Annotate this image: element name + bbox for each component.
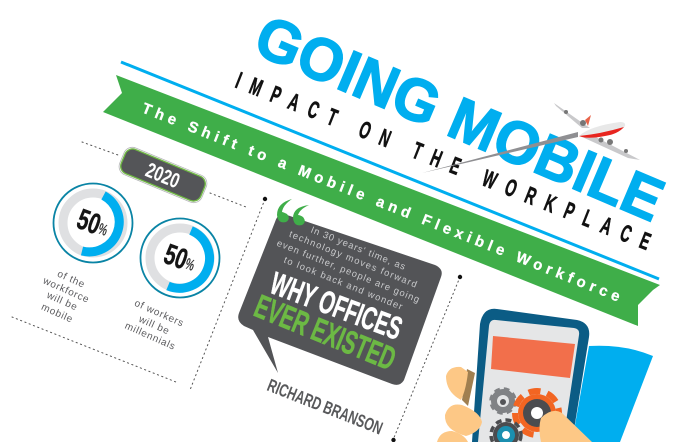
title: Going Mobile: GOING MOBILE [246,2,673,234]
illustration: phone in hand [437,309,653,442]
plane far wing [554,103,590,128]
plane trail [422,132,578,173]
phone screen [478,320,579,442]
gear: gray [491,389,515,413]
dotted frame lines with end dots [263,197,462,442]
plane near wing [580,134,640,160]
caption: of the workforce will be mobile: will be [44,290,79,313]
plane engines [564,110,628,153]
caption: of the workforce will be mobile: mobile [39,302,75,326]
finger shadow [462,369,475,406]
caption: of the workforce will be mobile: of the [55,269,87,291]
gear: orange [515,391,559,435]
subtitle: Impact on the workplace: IMPACT ON THE WORKPLACE [232,68,654,256]
donut chart: workers millennials [140,218,220,298]
hand fingers [437,367,592,442]
caption: of the workforce will be mobile [39,269,91,326]
blue rule under title [121,62,659,279]
caption: of workers will be millennials [123,298,186,353]
panel: 2020 statistics [12,142,265,390]
quote marks [277,199,309,225]
donut chart: workforce mobile: 50 [73,203,105,241]
donut chart: workers millennials: % [183,254,197,274]
quote text: to look back and wonder [282,254,404,312]
quote text: In 30 years' time, as [309,224,407,272]
donut chart: workforce mobile [54,184,132,262]
caption: of the workforce will be mobile: workforce [40,275,91,306]
airplane with trail [422,103,640,173]
blue background panel [572,346,653,442]
dotted frame lines [12,142,265,390]
badge: 2020 [116,145,210,205]
panel: quote [238,197,462,442]
donut chart: workers millennials: 50 [160,238,192,276]
caption: of workers will be millennials: will be [136,314,171,337]
quote text: technology moves forward [288,228,419,290]
speech bubble [238,214,442,385]
banner text: The Shift to a Mobile and Flexible Workforce [140,100,622,305]
badge: 2020: 2020 [142,157,183,193]
phone body [472,309,589,442]
gear: dark with teal centre [491,420,521,442]
quote text: even further, people are going [275,237,421,305]
caption: of workers will be millennials: of workers [133,298,186,330]
donut chart: workforce mobile: % [96,219,110,239]
caption: of workers will be millennials: millennials [123,321,177,353]
plane tail [585,115,591,126]
quote attribution: RICHARD BRANSON [264,375,385,439]
plane fuselage [579,122,625,138]
quote headline: ever existed: EVER EXISTED [249,287,401,377]
quote headline: why offices: WHY OFFICES [265,265,407,347]
orange screen block [491,336,575,378]
